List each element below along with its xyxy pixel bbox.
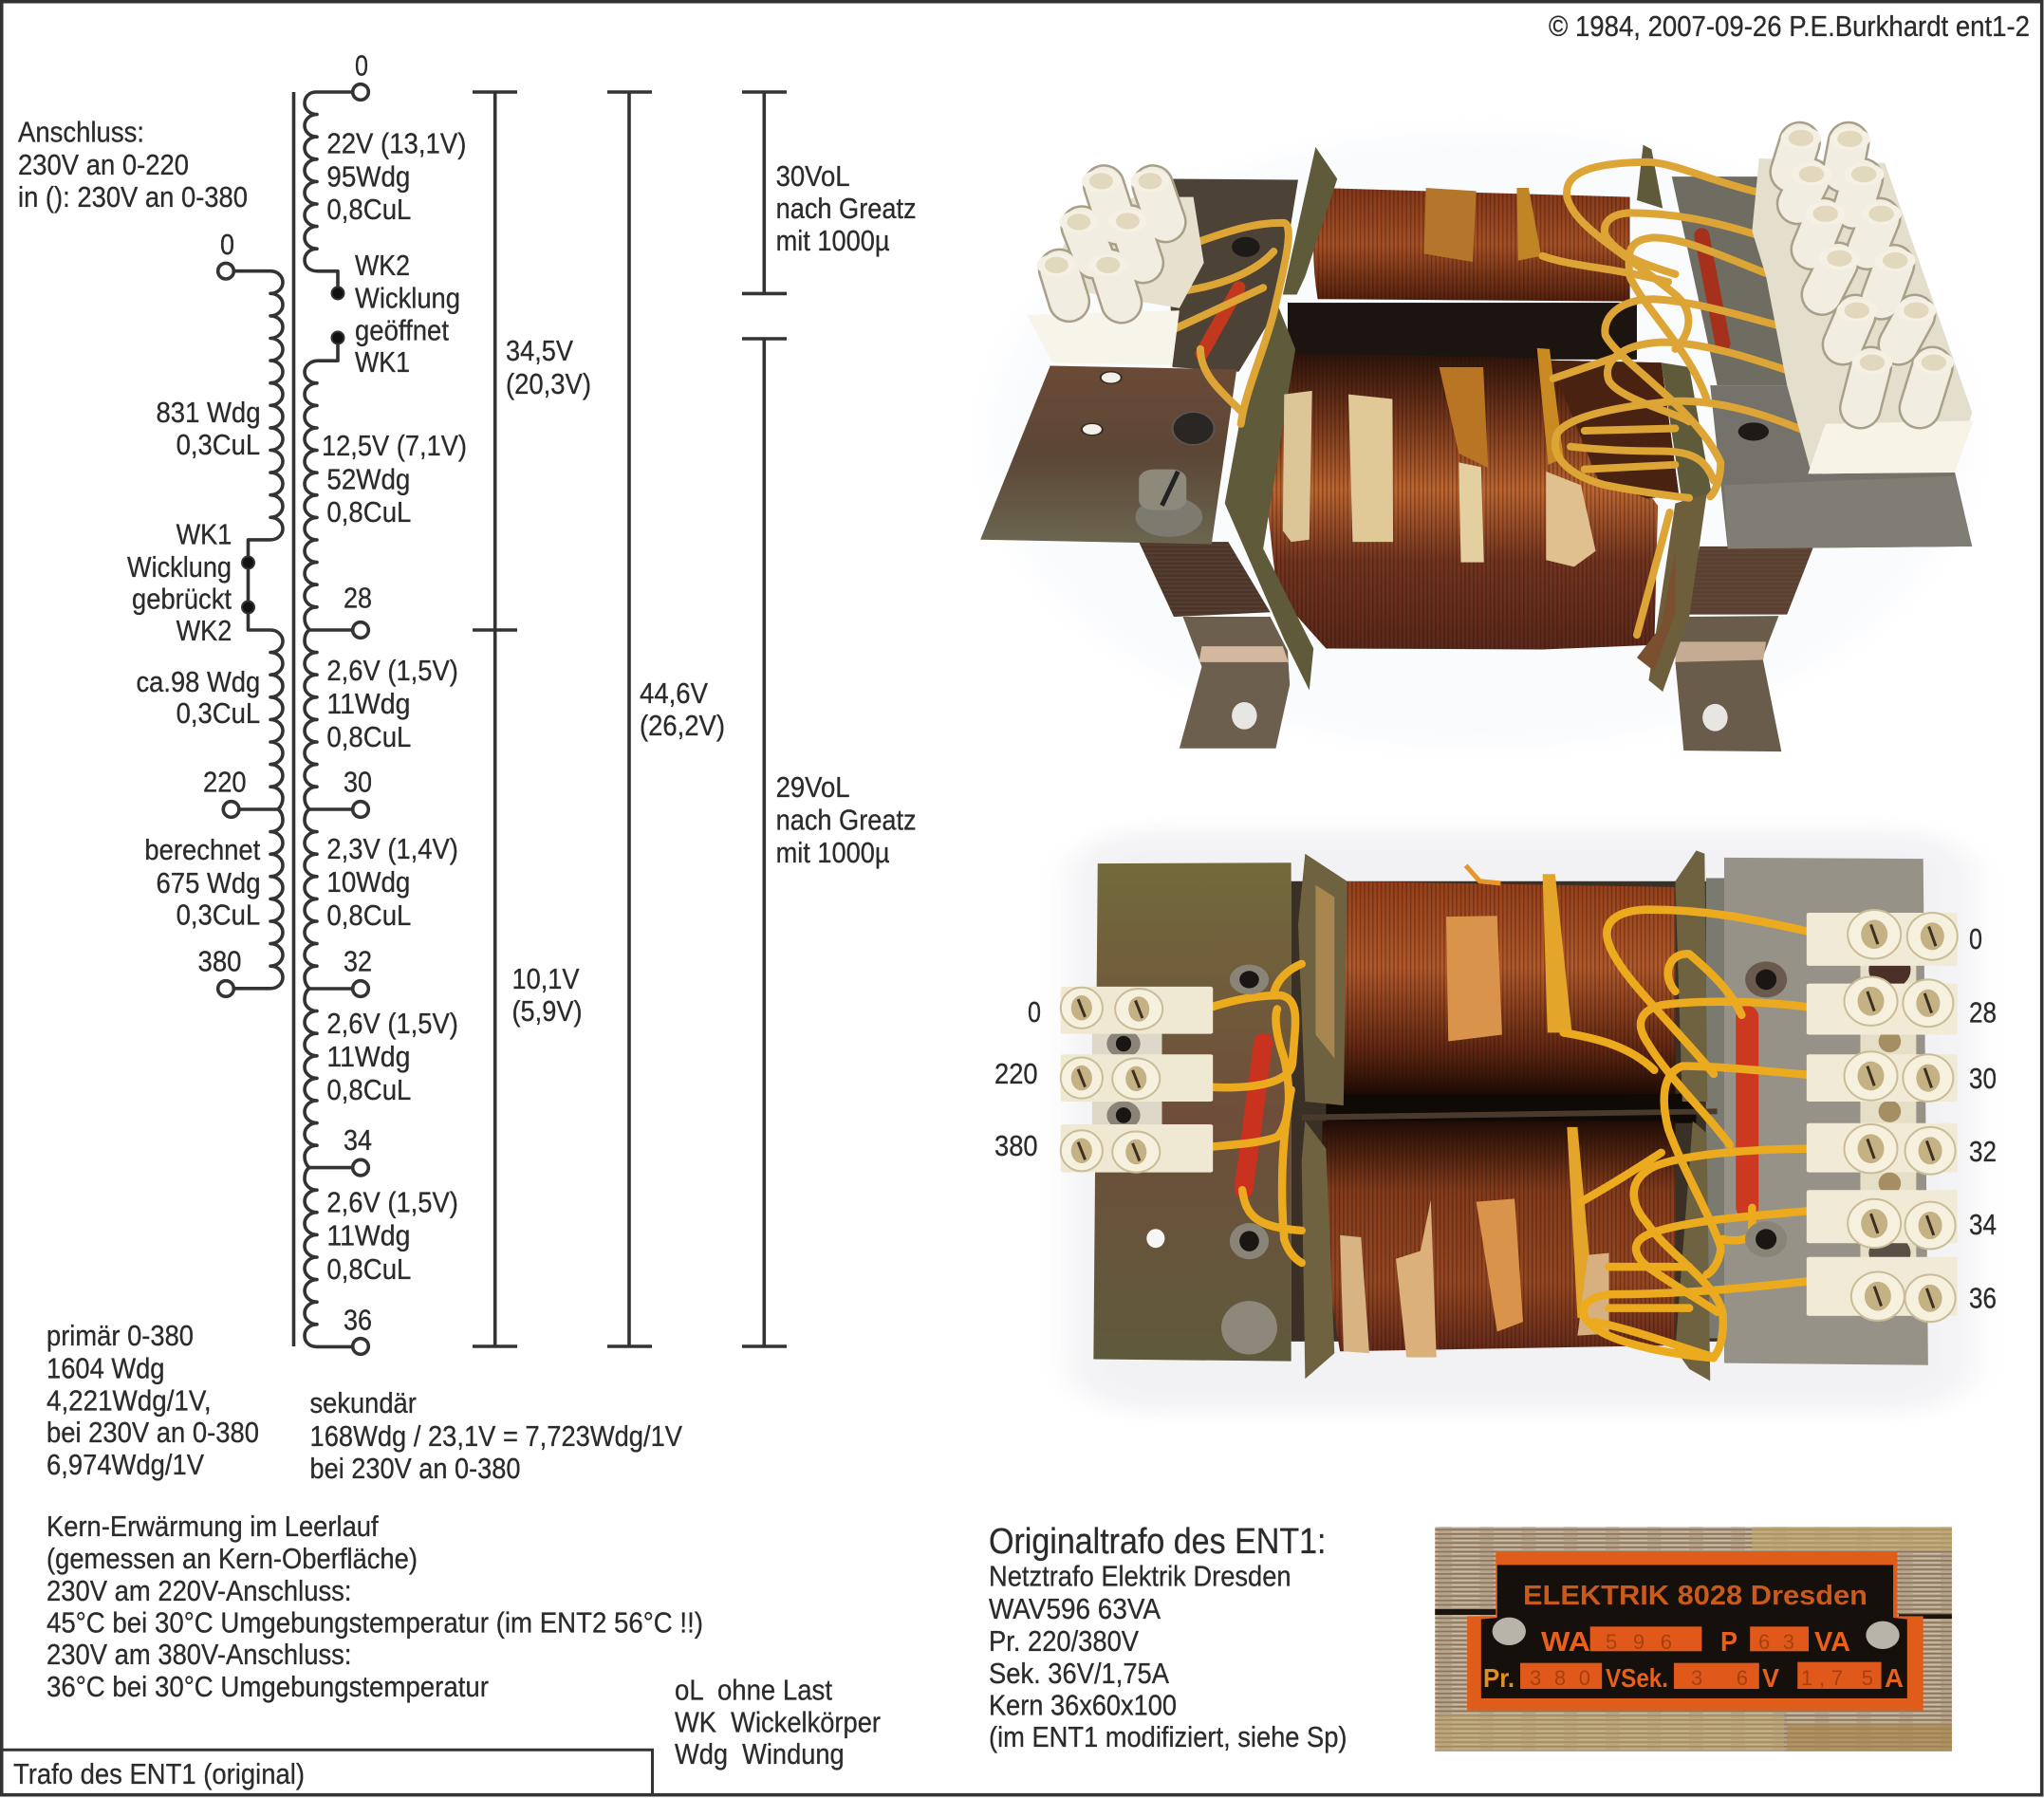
soft shadow <box>991 131 1969 749</box>
left plate <box>1093 862 1291 1362</box>
text: primary winding labels <box>127 228 261 977</box>
text: secondary data <box>309 1386 682 1485</box>
plate lettering: P <box>1720 1627 1737 1658</box>
text: voltage values: 10,1V <box>512 962 580 995</box>
core sides <box>1139 542 1813 617</box>
plate holes and nuts <box>1146 961 1787 1355</box>
photo terminal labels <box>994 922 1997 1315</box>
text: secondary winding labels: 52Wdg <box>326 463 410 496</box>
text: abbreviations legend: oL ohne Last <box>675 1674 832 1707</box>
text: primary data: primär 0-380 <box>46 1319 194 1352</box>
text: voltage values: mit 1000µ <box>776 224 890 257</box>
text: original transformer data: Pr. 220/380V <box>989 1624 1139 1658</box>
plate lettering: 6 3 <box>1758 1630 1794 1654</box>
text: primary winding labels: 0,3CuL <box>177 696 260 730</box>
photo: transformer oblique view <box>980 126 1974 751</box>
text: original transformer data: WAV596 63VA <box>989 1592 1161 1625</box>
plate lettering: VA <box>1814 1627 1850 1658</box>
text: secondary data: bei 230V an 0-380 <box>309 1452 520 1485</box>
text: secondary data: 168Wdg / 23,1V = 7,723Wdg/1V <box>309 1419 682 1453</box>
text: primary data: 1604 Wdg <box>46 1352 165 1385</box>
text: voltage values: mit 1000µ <box>776 836 890 869</box>
plate lettering: 3 6 <box>1691 1666 1748 1690</box>
plate lettering: V <box>1762 1663 1779 1693</box>
photo terminal labels: 0 <box>1028 995 1041 1029</box>
text: primary winding labels: 380 <box>197 945 241 977</box>
primary winding lower <box>234 809 283 989</box>
photo terminal labels: 36 <box>1969 1282 1997 1315</box>
text: primary winding labels: 0 <box>220 228 234 261</box>
plate lettering: ELEKTRIK 8028 Dresden <box>1523 1581 1867 1611</box>
photo terminal labels: 32 <box>1969 1135 1997 1168</box>
tape strips <box>1283 348 1596 566</box>
text: secondary winding labels: WK2 <box>355 249 410 282</box>
text: primary winding labels: ca.98 Wdg <box>137 665 260 698</box>
text: primary winding labels: 0,3CuL <box>177 428 260 461</box>
text: secondary winding labels: 34 <box>344 1123 372 1157</box>
text: secondary winding labels: 32 <box>344 945 372 977</box>
top coil <box>1335 881 1675 1096</box>
text: secondary winding labels: Wicklung <box>355 281 460 315</box>
plate lettering: 5 9 6 <box>1606 1630 1672 1654</box>
right plate <box>1724 858 1928 1365</box>
plate holes and screw <box>1082 237 1769 537</box>
text: core heating: (gemessen an Kern-Oberfläche) <box>46 1542 418 1575</box>
back coil <box>1313 188 1630 302</box>
photo terminal labels: 30 <box>1969 1062 1997 1095</box>
orange value fields <box>1520 1626 1882 1689</box>
text: primary data: 4,221Wdg/1V, <box>46 1384 212 1418</box>
text: primary data: 6,974Wdg/1V <box>46 1448 204 1481</box>
left terminal block <box>1027 170 1204 365</box>
text: core heating: 230V am 220V-Anschluss: <box>46 1574 351 1607</box>
core line <box>292 92 295 1346</box>
text: secondary winding labels: 12,5V (7,1V) <box>322 429 467 462</box>
text: primary data <box>46 1319 259 1481</box>
text: original transformer data: Originaltrafo des ENT1: <box>989 1522 1327 1562</box>
text: original transformer data: (im ENT1 modifiziert, siehe Sp) <box>989 1720 1347 1753</box>
text: primary winding labels: 220 <box>203 766 247 799</box>
text: voltage values: (26,2V) <box>640 709 725 742</box>
right terminal strips <box>1807 910 1958 1322</box>
back flanges <box>1283 145 1663 294</box>
title box <box>2 1750 653 1794</box>
text: voltage values: 29VoL <box>776 770 850 804</box>
plate lettering <box>1483 1581 1904 1693</box>
text: primary winding labels: 831 Wdg <box>156 396 260 429</box>
text: voltage values: nach Greatz <box>776 803 917 837</box>
tape strips <box>1340 865 1609 1357</box>
text: core heating: 230V am 380V-Anschluss: <box>46 1638 351 1671</box>
text: secondary winding labels: 2,3V (1,4V) <box>326 832 458 865</box>
mounting feet <box>1180 616 1781 751</box>
core centre <box>1291 881 1724 1342</box>
photo terminal labels: 220 <box>994 1057 1038 1090</box>
wires <box>1165 162 1815 635</box>
secondary winding WK1 to 28 <box>305 338 338 629</box>
text: secondary winding labels: 2,6V (1,5V) <box>326 1186 458 1218</box>
text: secondary winding labels: 0,8CuL <box>326 1073 411 1106</box>
flanges <box>1298 850 1710 1381</box>
text: secondary data: sekundär <box>309 1386 417 1419</box>
front coil <box>1262 354 1712 649</box>
plate lettering: A <box>1885 1663 1904 1693</box>
text: abbreviations legend: Wdg Windung <box>675 1737 845 1770</box>
primary winding upper <box>234 271 283 809</box>
front flanges <box>1225 304 1707 692</box>
text: secondary winding labels: 95Wdg <box>326 159 410 193</box>
text: secondary winding labels: 0,8CuL <box>326 495 411 528</box>
text: original transformer data <box>989 1522 1347 1753</box>
text: core heating: Kern-Erwärmung im Leerlauf <box>46 1510 379 1543</box>
text: secondary winding labels: 11Wdg <box>326 1218 410 1252</box>
secondary winding 30 to 32 <box>305 809 352 989</box>
front right plate <box>1710 385 1972 548</box>
black plate field <box>1481 1565 1907 1698</box>
text: connection note <box>18 116 248 213</box>
text: connection note: 230V an 0-220 <box>18 148 189 181</box>
back core plates <box>1167 176 1815 385</box>
voltage bars <box>473 92 787 1346</box>
photo: name plate <box>1435 1527 1952 1752</box>
secondary winding 28 to 30 <box>305 630 352 809</box>
secondary winding WK2 <box>305 92 352 293</box>
text: primary winding labels: Wicklung <box>127 550 232 584</box>
dark gap <box>1288 303 1637 360</box>
terminals <box>218 84 368 1354</box>
text: voltage values: (5,9V) <box>512 994 583 1028</box>
text: secondary winding labels: 30 <box>344 766 372 799</box>
winding junction dots <box>242 287 344 613</box>
text: secondary winding labels: 2,6V (1,5V) <box>326 1007 458 1040</box>
red sleeves <box>1201 235 1722 354</box>
laminated core background <box>1435 1527 1952 1752</box>
text: secondary winding labels: 0 <box>355 49 368 82</box>
photo terminal labels: 380 <box>994 1129 1038 1162</box>
text: primary winding labels: gebrückt <box>132 583 232 615</box>
text: connection note: Anschluss: <box>18 116 144 149</box>
text: secondary winding labels: 0,8CuL <box>326 193 411 226</box>
plate lettering: VSek. <box>1606 1663 1668 1693</box>
text: secondary winding labels: 0,8CuL <box>326 1252 411 1286</box>
text: original transformer data: Netztrafo Elektrik Dresden <box>989 1560 1291 1593</box>
text: secondary winding labels: 2,6V (1,5V) <box>326 654 458 687</box>
text: voltage values <box>506 159 917 1028</box>
photo terminal labels: 0 <box>1969 922 1982 955</box>
title box: Trafo des ENT1 (original) <box>13 1757 305 1790</box>
text: primary winding labels: berechnet <box>144 833 261 866</box>
text: secondary winding labels: 10Wdg <box>326 865 410 899</box>
text: secondary winding labels: 11Wdg <box>326 1040 410 1073</box>
plate lettering: WA <box>1541 1627 1590 1658</box>
text: primary winding labels: WK1 <box>177 518 232 551</box>
text: secondary winding labels: 22V (13,1V) <box>326 127 466 160</box>
text: abbreviations legend <box>675 1674 881 1770</box>
transformer schematic <box>218 84 368 1354</box>
text: secondary winding labels: 36 <box>344 1304 372 1336</box>
photo terminal labels: 34 <box>1969 1208 1997 1241</box>
text: voltage values: 44,6V <box>640 677 708 710</box>
wires <box>1194 910 1822 1358</box>
text: voltage values: 30VoL <box>776 159 850 193</box>
text: secondary winding labels: WK1 <box>355 345 410 379</box>
text: original transformer data: Kern 36x60x100 <box>989 1689 1177 1722</box>
text: secondary winding labels: 11Wdg <box>326 687 410 720</box>
mounting holes <box>1493 1618 1900 1649</box>
secondary winding 32 to 34 <box>305 989 352 1168</box>
text: secondary winding labels: 28 <box>344 582 372 615</box>
photo: transformer top view <box>1061 830 1976 1412</box>
text: abbreviations legend: WK Wickelkörper <box>675 1706 881 1739</box>
text: secondary winding labels: 0,8CuL <box>326 720 411 753</box>
front left plate <box>980 366 1236 545</box>
text: original transformer data: Sek. 36V/1,75A <box>989 1657 1169 1690</box>
text: secondary winding labels <box>322 49 467 1336</box>
text: core heating: 36°C bei 30°C Umgebungstemperatur <box>46 1670 489 1703</box>
text: secondary winding labels: geöffnet <box>355 313 449 347</box>
secondary winding 34 to 36 <box>305 1168 352 1346</box>
right terminal block <box>1752 126 1974 473</box>
text: primary winding labels: WK2 <box>177 614 232 647</box>
text: voltage values: 34,5V <box>506 334 573 367</box>
bottom coil <box>1322 1121 1675 1351</box>
photo terminal labels: 28 <box>1969 996 1997 1029</box>
plate lettering: 1,7 5 <box>1801 1666 1873 1690</box>
text: secondary winding labels: 0,8CuL <box>326 899 411 932</box>
plate lettering: 3 8 0 <box>1530 1666 1590 1690</box>
soft shadow <box>1068 830 1976 1412</box>
text: primary winding labels: 675 Wdg <box>156 866 260 899</box>
divider <box>1302 1094 1718 1123</box>
text: primary winding labels: 0,3CuL <box>177 898 260 932</box>
text: voltage values: nach Greatz <box>776 192 917 225</box>
text: core heating <box>46 1510 703 1703</box>
orange plate <box>1467 1551 1923 1711</box>
text: core heating: 45°C bei 30°C Umgebungstemperatur (im ENT2 56°C !!) <box>46 1606 703 1640</box>
text: primary data: bei 230V an 0-380 <box>46 1416 259 1449</box>
text: voltage values: (20,3V) <box>506 367 591 400</box>
text: connection note: in (): 230V an 0-380 <box>18 180 248 213</box>
red sleeves <box>1244 1017 1747 1207</box>
plate lettering: Pr. <box>1483 1663 1514 1693</box>
left terminal strips <box>1061 987 1213 1173</box>
